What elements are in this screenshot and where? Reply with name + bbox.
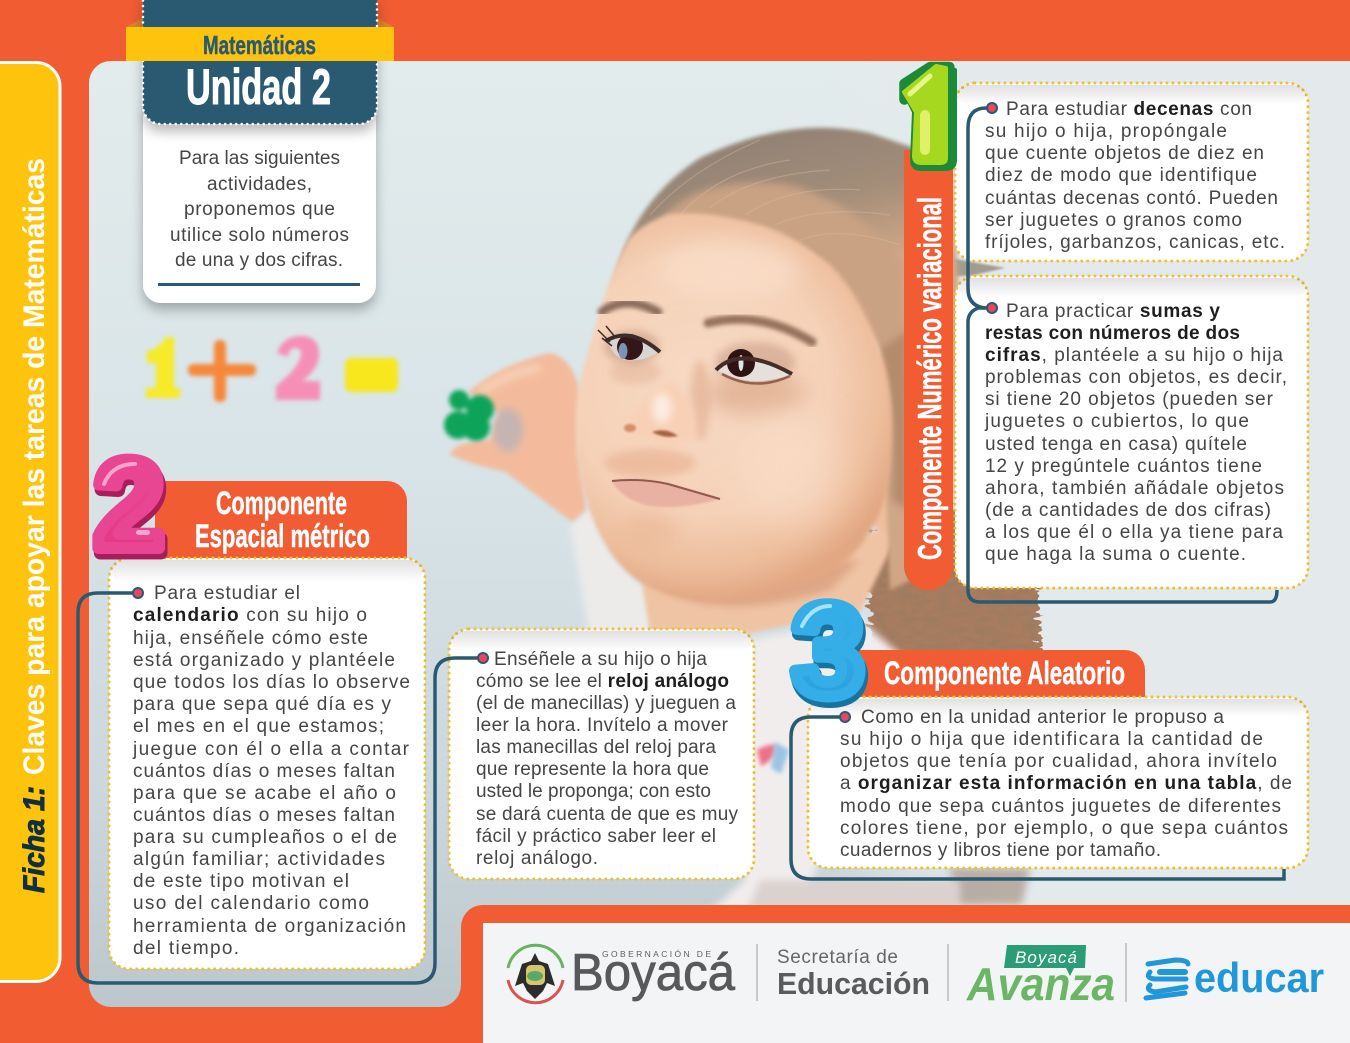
tabla text: cuadernos y libros tiene por tamaño. [840, 840, 1161, 861]
footer [461, 905, 1350, 1043]
reloj text: cómo se lee el reloj análogo [476, 671, 729, 692]
sidebar title: Claves para apoyar las tareas de Matemáticas [18, 158, 51, 775]
intro text: utilice solo números [170, 225, 349, 246]
sumas text: cifras, plantéele a su hijo o hija [985, 345, 1283, 366]
header: intro card [143, 100, 376, 303]
logo: Gobernación de Boyacá: GOBERNACIÓN DE [602, 949, 711, 959]
panel: sumas y restas [955, 276, 1308, 588]
intro text: proponemos que [184, 199, 335, 220]
calendario text: juegue con él o ella a contar [132, 739, 410, 760]
sumas text: si tiene 20 objetos (pueden ser [985, 389, 1274, 410]
decenas text: fríjoles, garbanzos, canicas, etc. [985, 232, 1285, 253]
sumas text: a los que él o ella ya tiene para [985, 522, 1283, 543]
decenas text: diez de modo que identifique [985, 165, 1257, 186]
panel: Espacial métrico title tab [155, 481, 407, 565]
tab label: Espacial métrico [195, 518, 370, 554]
calendario text: que todos los días lo observe [133, 672, 410, 693]
logo: Secretaría de Educación: Educación [777, 966, 930, 1001]
tabla text: a organizar esta información en una tabla, de [840, 773, 1292, 794]
calendario text: para que sepa qué día es y [133, 694, 392, 715]
calendario text: Para estudiar el [154, 583, 300, 604]
decenas text [985, 99, 1285, 253]
tabla text: modo que sepa cuántos juguetes de diferentes [840, 796, 1281, 817]
logo: Boyacá Avanza: Avanza [966, 958, 1115, 1010]
sumas text: juguetes o cubiertos, lo que [984, 411, 1249, 432]
calendario text: cuántos días o meses faltan [133, 761, 395, 782]
emblem [508, 945, 563, 1003]
reloj text: Enséñele a su hijo o hija [494, 649, 707, 670]
calendario text: de este tipo motivan el [133, 871, 349, 892]
calendario text: calendario con su hijo o [133, 605, 367, 626]
photo: shirt [570, 510, 650, 629]
decenas text: ser juguetes o granos como [985, 210, 1242, 231]
photo: eyebrows [602, 303, 812, 342]
sidebar title: Ficha 1: [18, 786, 51, 893]
reloj text [476, 649, 738, 869]
tabla text [840, 707, 1292, 861]
sumas text: restas con números de dos [985, 323, 1240, 344]
calendario text [132, 583, 410, 959]
header: unit tab [126, 0, 394, 124]
tab label [195, 485, 370, 554]
divider [947, 944, 949, 1001]
book icon [1146, 960, 1188, 998]
tabla text: Como en la unidad anterior le propuso a [861, 707, 1224, 728]
connector: left column [78, 588, 488, 983]
tab label: Componente Aleatorio [884, 655, 1125, 691]
photo: blurred magnets 1+2= [146, 336, 398, 402]
photo: neck [640, 529, 890, 635]
decenas text: su hijo o hija, propóngale [985, 121, 1227, 142]
calendario text: cuántos días o meses faltan [133, 805, 395, 826]
tabla text: objetos que tenía por cualidad, ahora invítelo [840, 751, 1277, 772]
calendario text: del tiempo. [133, 938, 239, 959]
divider [1125, 943, 1127, 1002]
photo: face [576, 213, 892, 601]
intro text [170, 148, 349, 271]
reloj text: reloj análogo. [476, 848, 598, 869]
icon: numeral 3: 3 [792, 577, 864, 723]
footer light panel [483, 923, 1350, 1043]
panel: tabla [808, 697, 1308, 868]
panel: Aleatorio title tab [850, 650, 1145, 700]
photo: eyes [598, 326, 795, 384]
tab label: Componente [216, 485, 347, 521]
intro text: Para las siguientes [179, 148, 340, 169]
subject band [126, 27, 394, 61]
calendario text: uso del calendario como [133, 893, 369, 914]
sumas text: Para practicar sumas y [1006, 301, 1220, 322]
calendario text: el mes en el que estamos; [133, 716, 384, 737]
icon: numeral 2: 2 [94, 434, 164, 575]
sumas text: ahora, también añádale objetos [985, 478, 1284, 499]
icon: numeral 2: 2 [96, 439, 166, 580]
logo: Boyacá Avanza: Boyacá [1015, 948, 1077, 967]
panel: Numérico variacional title bar [904, 150, 953, 590]
logo: educar [1146, 954, 1324, 1001]
reloj text: se dará cuenta de que es muy [476, 804, 738, 825]
bar label: Componente Numérico variacional [911, 197, 948, 560]
tabla text: colores tiene, por ejemplo, o que sepa cuántos [840, 818, 1288, 839]
decenas text: cuántas decenas contó. Pueden [985, 188, 1278, 209]
logo: educar: educar [1194, 954, 1324, 1001]
sumas text [984, 301, 1287, 565]
photo: face shading [604, 242, 840, 548]
calendario text: herramienta de organización [133, 916, 406, 937]
photo: ear [872, 487, 890, 532]
decenas text: que cuente objetos de diez en [985, 143, 1264, 164]
sumas text: problemas con objetos, es decir, [985, 367, 1287, 388]
photo: hair back [864, 503, 1043, 650]
calendario text: está organizado y plantéele [133, 650, 395, 671]
logo: Secretaría de Educación: Secretaría de [777, 947, 898, 968]
connector: aleatorio [791, 712, 1284, 879]
reloj text: leer la hora. Invítelo a mover [476, 715, 729, 736]
calendario text: algún familiar; actividades [133, 849, 385, 870]
calendario text: hija, enséñele cómo este [133, 628, 368, 649]
sumas text: que haga la suma o cuente. [985, 544, 1246, 565]
connector: right column [968, 103, 1277, 602]
photo: hair strands [650, 140, 900, 246]
icon: numeral 1 [899, 62, 957, 171]
icon: numeral 3: 3 [794, 582, 866, 728]
icon: numeral 1: 1 [894, 34, 977, 202]
tabla text: su hijo o hija que identificara la cantidad de [840, 729, 1263, 750]
sumas text: usted tenga en casa) quítele [985, 434, 1247, 455]
reloj text: usted le proponga; con esto [476, 781, 711, 802]
footer orange band [461, 905, 1350, 1043]
photo: nose [622, 385, 696, 438]
calendario text: para que se acabe el año o [133, 783, 396, 804]
subject label: Matemáticas [203, 30, 316, 60]
reloj text: las manecillas del reloj para [476, 737, 716, 758]
panel: calendario [109, 558, 425, 969]
unit title: Unidad 2 [186, 59, 331, 115]
intro text: de una y dos cifras. [175, 250, 343, 271]
reloj text: que represente la hora que [476, 759, 709, 780]
sumas text: (de a cantidades de dos cifras) [985, 500, 1271, 521]
photo: hair top [612, 128, 960, 590]
panel: reloj análogo [449, 629, 754, 879]
sumas text: 12 y pregúntele cuántos tiene [985, 456, 1262, 477]
logo: Gobernación de Boyacá [508, 944, 735, 1003]
reloj text: (el de manecillas) y jueguen a [476, 693, 736, 714]
calendario text: para su cumpleaños o el de [133, 827, 397, 848]
intro text: actividades, [207, 174, 312, 195]
photo: green magnet [444, 390, 494, 441]
divider [756, 944, 758, 1001]
logo: Gobernación de Boyacá: Boyacá [571, 944, 735, 1002]
photo: hand [450, 353, 586, 522]
reloj text: fácil y práctico saber leer el [476, 826, 716, 847]
sidebar [0, 62, 60, 982]
photo: mouth [612, 479, 720, 507]
decenas text: Para estudiar decenas con [1006, 99, 1252, 120]
panel: decenas [955, 83, 1308, 261]
logo: Secretaría de Educación [777, 947, 930, 1001]
